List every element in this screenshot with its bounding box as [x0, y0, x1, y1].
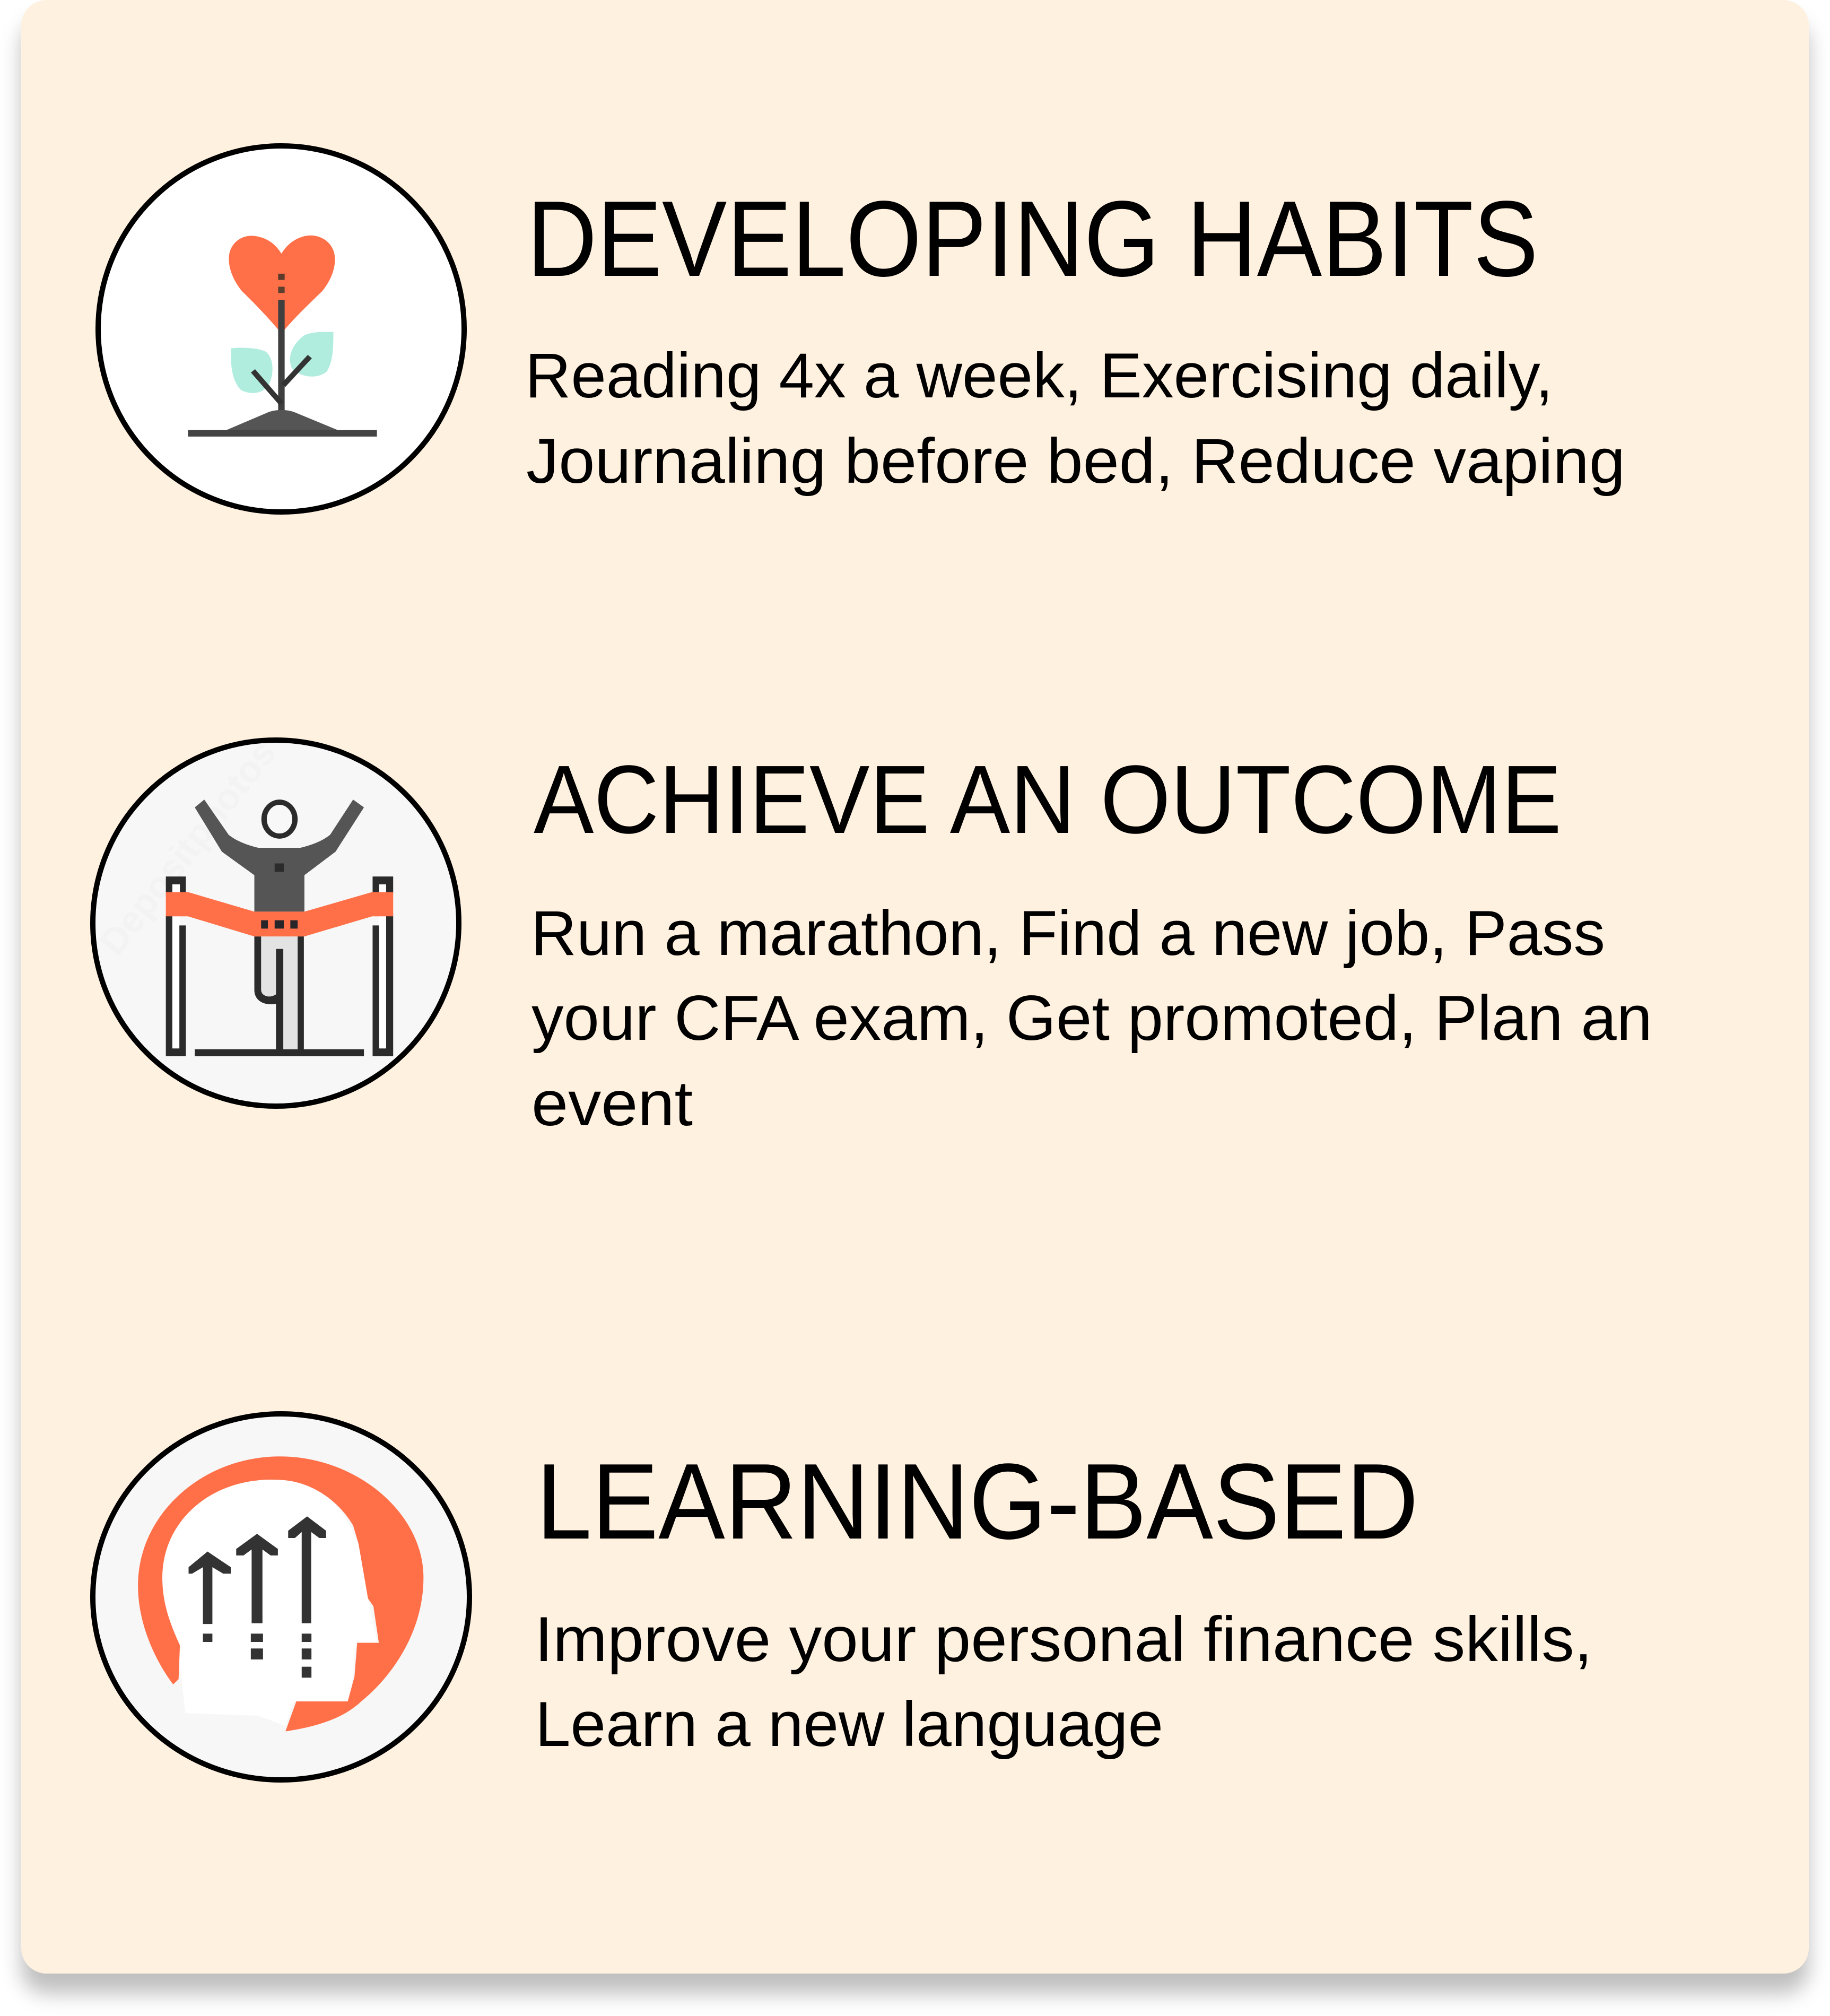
- text: learning examples: Improve your personal finance skills,: [535, 1604, 1592, 1675]
- text: learning examples: Learn a new language: [535, 1689, 1163, 1760]
- icon: runner crossing finish line: [91, 732, 459, 1106]
- heading: achieve an outcome: ACHIEVE AN OUTCOME: [534, 745, 1562, 854]
- text: outcome examples: event: [531, 1068, 693, 1139]
- icon: runner crossing finish line: Depositphotos: [91, 732, 284, 962]
- text: outcome examples: [531, 898, 1652, 1139]
- text: outcome examples: Run a marathon, Find a new job, Pass: [531, 898, 1605, 969]
- icon: head with rising arrows: [93, 1414, 469, 1780]
- section: developing habits: [98, 146, 1625, 512]
- section: learning-based: [93, 1414, 1592, 1780]
- text: learning examples: [535, 1604, 1592, 1760]
- heading: developing habits: DEVELOPING HABITS: [527, 179, 1538, 299]
- heading: learning-based: LEARNING-BASED: [536, 1441, 1418, 1562]
- section: achieve an outcome: [91, 732, 1652, 1139]
- text: habit examples: Reading 4x a week, Exercising daily,: [525, 340, 1553, 411]
- text: outcome examples: your CFA exam, Get promoted, Plan an: [531, 983, 1652, 1054]
- text: habit examples: Journaling before bed, Reduce vaping: [526, 425, 1625, 497]
- text: habit examples: [525, 340, 1625, 497]
- icon: heart plant: [98, 146, 464, 512]
